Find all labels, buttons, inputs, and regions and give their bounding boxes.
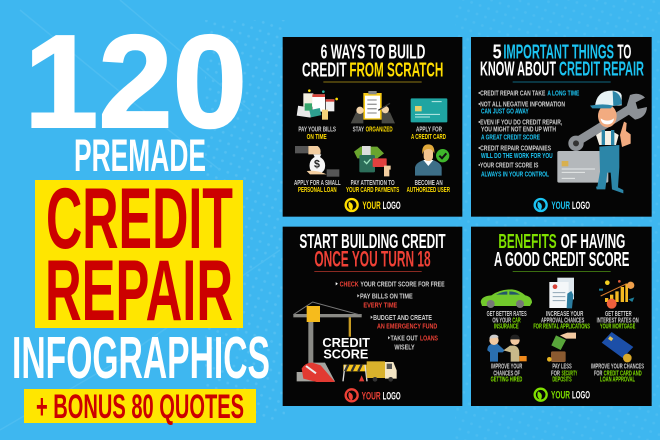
icon: rental application papers (549, 278, 574, 308)
heading: TO (617, 41, 631, 63)
bullet list: AN EMERGENCY FUND (377, 322, 438, 331)
label: stay organized: ORGANIZED (366, 127, 393, 134)
label: pay your bills on time: PAY YOUR BILLS (298, 127, 336, 134)
logo (535, 199, 590, 212)
logo (346, 199, 401, 212)
label: credit score sign: CREDIT (322, 335, 370, 350)
label: security deposits: PAY LESS (552, 364, 572, 371)
label: rental applications (533, 311, 590, 331)
heading: KNOW ABOUT (480, 59, 556, 81)
logo (535, 389, 590, 402)
icon: mortgage rates chart (599, 280, 634, 309)
label: credit card and loan approval: LOAN APPROVAL (600, 377, 635, 384)
logo: YOUR (551, 200, 570, 212)
bullet list: CHECK (340, 279, 359, 288)
icon: construction rubble and cone (297, 363, 335, 382)
label: apply for a credit card: APPLY FOR (416, 127, 442, 134)
heading: premade: PREMADE (74, 130, 206, 181)
logo: YOUR (362, 390, 381, 402)
bullet list: A GREAT CREDIT SCORE (481, 132, 540, 141)
label: apply for a credit card (411, 127, 446, 141)
bullet list: LOANS (420, 334, 438, 343)
bullet list: ‣BUDGET AND CREATE (370, 313, 432, 322)
label: stay organized: STAY (353, 127, 364, 134)
label: getting hired: GETTING HIRED (491, 377, 522, 384)
label: rental applications: INCREASE YOUR (546, 311, 583, 318)
icon: barricade and truck (343, 361, 397, 382)
heading: ONCE YOU TURN 18 (314, 247, 431, 272)
bullet list: YOUR CREDIT SCORE FOR FREE (360, 279, 445, 288)
icon: card payment terminal (354, 146, 391, 176)
label: become an authorized user (407, 180, 450, 194)
logo (346, 389, 401, 402)
bullet list: A LONG TIME (547, 89, 579, 98)
bullet list: ‣ (335, 279, 339, 288)
logo: LOGO (383, 200, 401, 212)
icon: loan money bag: $ (314, 159, 320, 171)
logo: LOGO (572, 390, 590, 402)
label: become an authorized user: AUTHORIZED USER (407, 187, 450, 194)
heading: BENEFITS (498, 231, 557, 253)
label: security deposits: FOR (551, 370, 560, 377)
bullet list: •NOT ALL NEGATIVE INFORMATION (478, 99, 565, 108)
bullet list: •YOUR CREDIT SCORE IS (478, 161, 538, 170)
heading (494, 231, 629, 271)
icon: clipboard (351, 91, 395, 123)
panel: 6 ways to build credit (283, 37, 462, 217)
label: car insurance: ON YOUR (492, 317, 511, 324)
label: apply for a small personal loan (294, 180, 341, 194)
label: stay organized (353, 127, 393, 134)
bullet list: CAN JUST GO AWAY (481, 106, 529, 115)
label: getting hired (491, 364, 522, 384)
yellow title box: CREDIT (46, 171, 233, 267)
panel: start building credit (283, 227, 462, 406)
icon: handshake (487, 335, 527, 362)
label: apply for a small personal loan: PERSONAL LOAN (298, 187, 337, 194)
label: credit score sign: SCORE (323, 347, 369, 362)
bullet list: EVERY TIME (363, 301, 397, 310)
bullet list: •CREDIT REPAIR COMPANIES (478, 144, 551, 153)
label: credit card and loan approval (591, 364, 644, 384)
label: car insurance (487, 311, 527, 331)
panel: benefits of good credit score: SECURITY (562, 370, 577, 377)
label: mortgage (597, 311, 639, 331)
label: become an authorized user: BECOME AN (415, 180, 443, 187)
label: car insurance: CAR (512, 317, 521, 324)
bonus banner: + BONUS 80 QUOTES (36, 388, 244, 426)
icon: green car (481, 289, 532, 308)
bullet list (478, 89, 579, 178)
heading: CREDIT (302, 60, 347, 82)
label: pay attention to your card payments: YOUR CARD PAYMENTS (346, 187, 400, 194)
bullet list: •EVEN IF YOU DO CREDIT REPAIR, (478, 117, 562, 126)
logo: LOGO (383, 390, 401, 402)
logo: LOGO (572, 200, 590, 212)
panel: 5 important things (471, 37, 652, 217)
icon: bills (297, 89, 338, 120)
label: car insurance: GET BETTER RATES (487, 311, 527, 318)
label: security deposits (551, 364, 577, 384)
heading: 6 WAYS TO BUILD (321, 41, 425, 63)
heading: infographics: INFOGRAPHICS (12, 325, 270, 391)
label: getting hired: CHANCES OF (493, 370, 520, 377)
heading (480, 41, 644, 81)
panel: benefits of good credit score (471, 227, 652, 406)
bullet list: ‣PAY BILLS ON TIME (357, 292, 413, 301)
heading: FROM SCRATCH (349, 60, 443, 82)
icon: authorized user (415, 144, 449, 176)
heading: START BUILDING CREDIT (299, 231, 446, 253)
bullet list: •CREDIT REPAIR CAN TAKE (478, 89, 545, 98)
bullet list: WILL DO THE WORK FOR YOU (481, 151, 553, 160)
heading (302, 41, 443, 82)
bullet list: WISELY (394, 343, 415, 352)
bullet list: YOU MIGHT NOT END UP WITH (481, 125, 556, 134)
label: credit card and loan approval: FOR (594, 370, 602, 377)
icon: blue credit card and coin (602, 332, 633, 362)
icon: credit card (411, 98, 447, 122)
bullet list: ‣TAKE OUT (387, 334, 418, 343)
label: car insurance: INSURANCE (494, 324, 519, 331)
title: 120: 120 (24, 8, 247, 155)
icon: loan money bag (295, 146, 339, 177)
icon: silver credit card (557, 151, 608, 183)
label: rental applications: APPROVAL CHANCES (541, 317, 585, 324)
label: apply for a credit card: A CREDIT CARD (411, 134, 446, 141)
heading (299, 231, 446, 272)
label: rental applications: FOR RENTAL APPLICATIONS (533, 324, 590, 331)
yellow title box: REPAIR (45, 243, 233, 339)
label: getting hired: IMPROVE YOUR (491, 364, 522, 371)
label: apply for a small personal loan: APPLY FOR A SMALL (294, 180, 341, 187)
label: mortgage: GET BETTER (605, 311, 632, 318)
logo: YOUR (551, 390, 570, 402)
bullet list (335, 279, 445, 352)
bullet list: ALWAYS IN YOUR CONTROL (481, 169, 549, 178)
heading: 5 (493, 41, 502, 63)
logo: YOUR (362, 200, 381, 212)
label: pay your bills on time: ON TIME (307, 134, 327, 141)
label: security deposits: DEPOSITS (552, 377, 572, 384)
icon: mechanic with wrench (568, 91, 647, 193)
label: credit score sign (322, 335, 370, 362)
yellow title box (35, 171, 243, 339)
icon: crane (293, 302, 362, 365)
label: pay attention to your card payments (346, 180, 400, 194)
label: pay your bills on time (298, 127, 336, 141)
bonus banner (24, 388, 256, 426)
label: pay attention to your card payments: PAY ATTENTION TO (351, 180, 395, 187)
icon: wallet and cash (547, 333, 576, 362)
